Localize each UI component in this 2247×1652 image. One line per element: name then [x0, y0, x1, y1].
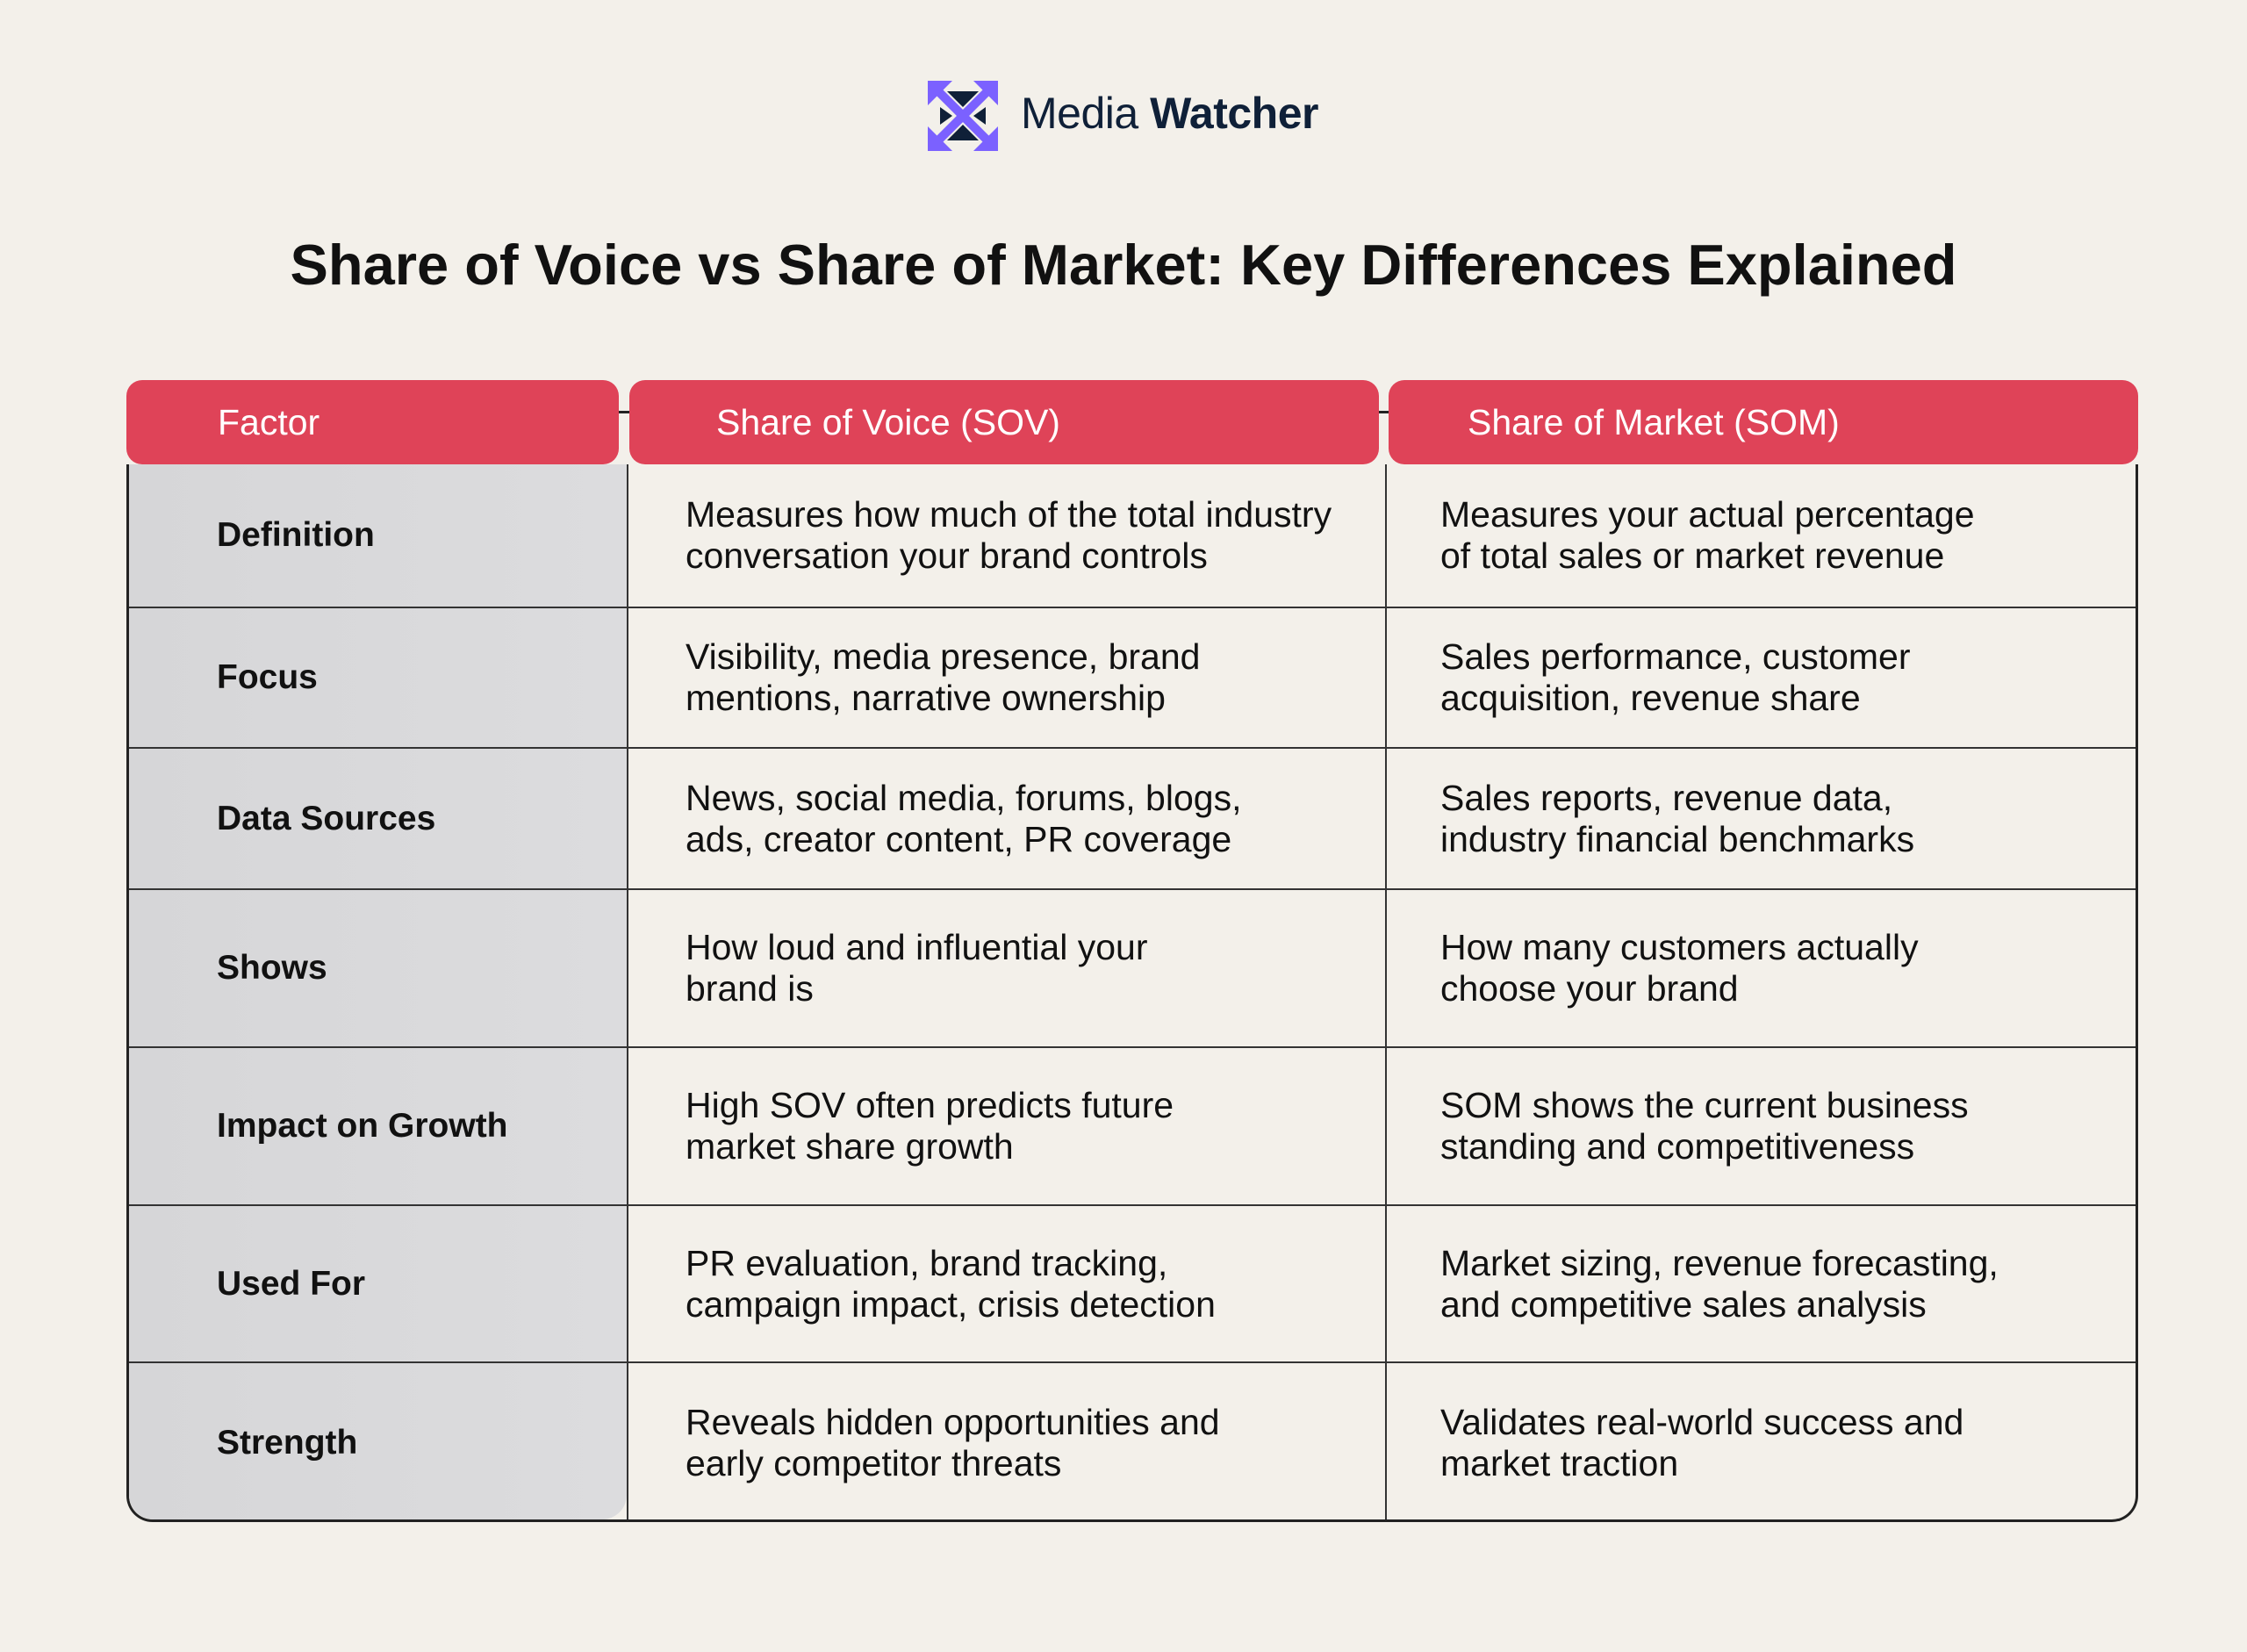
row: Strength: Validates real-world success and	[1440, 1401, 1963, 1441]
icon: logo mark	[928, 81, 998, 151]
table header: SOM: Share of Market (SOM)	[1468, 402, 1840, 442]
row: Focus: mentions, narrative ownership	[686, 678, 1166, 718]
table header: Factor: Factor	[218, 402, 319, 442]
row: Focus: Visibility, media presence, brand	[686, 636, 1200, 677]
row: Definition: of total sales or market revenue	[1440, 535, 1944, 576]
row: Focus: acquisition, revenue share	[1440, 678, 1861, 718]
table header: SOM	[1389, 380, 2138, 464]
row: Data Sources	[129, 747, 2136, 888]
row: Focus: Sales performance, customer	[1440, 636, 1911, 677]
row: Shows	[129, 888, 2136, 1046]
row: Focus	[129, 607, 2136, 747]
row: Focus: Focus	[217, 658, 318, 696]
row: Definition: conversation your brand controls	[686, 535, 1208, 576]
row: Used For: campaign impact, crisis detection	[686, 1283, 1216, 1324]
row: Impact on Growth: standing and competitiveness	[1440, 1126, 1914, 1167]
title: Share of Voice vs Share of Market: Key Differences Explained	[291, 233, 1956, 297]
row: Impact on Growth: SOM shows the current business	[1440, 1085, 1969, 1125]
row: Impact on Growth: High SOV often predicts future	[686, 1085, 1174, 1125]
row: Used For	[129, 1204, 2136, 1361]
row: Definition: Definition	[217, 516, 375, 554]
row: Shows: How loud and influential your	[686, 927, 1148, 967]
row: Impact on Growth	[129, 1046, 2136, 1204]
row: Definition	[217, 494, 1975, 576]
logo	[928, 81, 1318, 151]
row: Strength: Strength	[217, 1424, 357, 1461]
row: Definition: Measures your actual percentage	[1440, 494, 1975, 535]
row: Data Sources: industry financial benchmarks	[1440, 818, 1914, 858]
row: Shows: choose your brand	[1440, 968, 1739, 1009]
table header: SOV	[629, 380, 1379, 464]
row: Data Sources: News, social media, forums, blogs,	[686, 778, 1241, 818]
row: Shows: How many customers actually	[1440, 927, 1919, 967]
row: Shows: brand is	[686, 968, 814, 1009]
table header: Factor	[126, 380, 619, 464]
row: Definition: Measures how much of the total industry	[686, 494, 1332, 535]
row: Used For: Used For	[217, 1264, 365, 1303]
row: Data Sources: Data Sources	[217, 799, 435, 837]
row: Strength: early competitor threats	[686, 1443, 1061, 1483]
row: Data Sources: Sales reports, revenue data,	[1440, 778, 1892, 818]
row: Used For: Market sizing, revenue forecasting,	[1440, 1243, 1999, 1283]
row: Used For: PR evaluation, brand tracking,	[686, 1243, 1167, 1283]
row: Impact on Growth: market share growth	[686, 1126, 1014, 1167]
row: Data Sources: ads, creator content, PR coverage	[686, 818, 1231, 858]
row: Shows: Shows	[217, 949, 327, 987]
row: Impact on Growth: Impact on Growth	[217, 1107, 507, 1145]
table body	[126, 464, 2138, 1522]
row: Strength	[129, 1361, 2136, 1522]
logo text: Media Watcher	[1021, 89, 1318, 138]
row: Used For: and competitive sales analysis	[1440, 1283, 1927, 1324]
table header: SOV: Share of Voice (SOV)	[716, 402, 1060, 442]
row: Strength: Reveals hidden opportunities and	[686, 1401, 1220, 1441]
row: Strength: market traction	[1440, 1443, 1678, 1483]
